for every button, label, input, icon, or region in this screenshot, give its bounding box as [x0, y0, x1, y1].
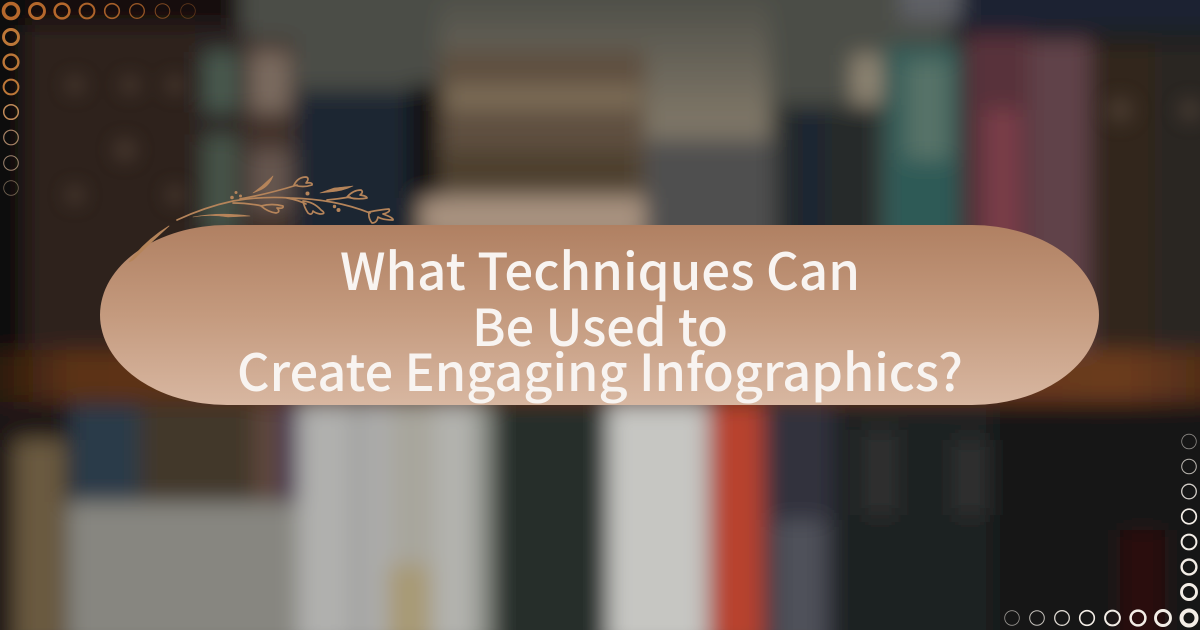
title line 3: Create Engaging Infographics? [237, 332, 963, 406]
sprig: branches [233, 185, 350, 206]
sprig: slim leaves [253, 176, 273, 193]
title text [237, 231, 963, 406]
title line 2: Be Used to [472, 287, 728, 361]
decorative ring row: bottom right [1005, 610, 1196, 626]
title banner pill [100, 225, 1099, 405]
decorative ring row: top left [4, 4, 195, 18]
background: soft highlights on dark books [65, 75, 1200, 205]
sprig: heart leaves [294, 177, 312, 186]
sprig: dots [230, 191, 340, 212]
floral sprig ornament [129, 176, 393, 262]
decorative ring column: top left [4, 30, 18, 195]
decorative ring column: bottom right [1182, 434, 1196, 600]
sprig: main stem [177, 197, 370, 220]
title line 1: What Techniques Can [340, 231, 860, 305]
sprig: outer sweep [129, 226, 169, 262]
